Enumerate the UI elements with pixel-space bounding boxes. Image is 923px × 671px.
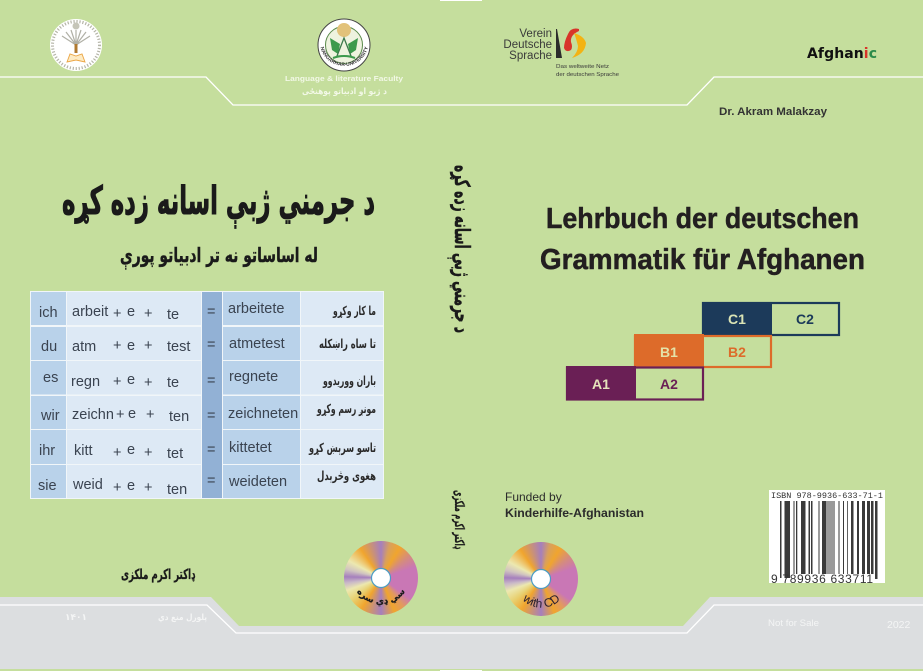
table row: sie: + xyxy=(113,480,121,496)
table row: ihr: tet xyxy=(167,446,183,462)
logo: Verein Deutsche Sprache: Verein xyxy=(519,28,552,40)
footer text: back: ۱۴۰۱ xyxy=(65,613,87,623)
footer text: back xyxy=(65,613,207,623)
faculty name xyxy=(285,74,404,97)
spine title: د جرمني ژبې اسانه زده کړه xyxy=(447,165,474,333)
table row: du: e xyxy=(127,338,135,354)
table row: ihr xyxy=(39,440,376,462)
CD label: Pashto: سي ډي سره xyxy=(357,590,404,606)
front title xyxy=(540,203,865,276)
table row: du: du xyxy=(41,339,57,355)
barcode: 9 789936 633711 xyxy=(771,572,873,586)
logo: Verein Deutsche Sprache: Sprache xyxy=(509,50,552,62)
table row: du: = xyxy=(207,337,215,353)
logo: left seal xyxy=(50,19,102,71)
CEFR level steps: A1 xyxy=(592,376,610,392)
table row: ihr: = xyxy=(207,442,215,458)
table row: du: تا ساه راښکله xyxy=(319,336,376,351)
back author name: ډاکتر اکرم ملکزی xyxy=(121,567,195,583)
CD: back cover xyxy=(344,541,418,615)
logo: Afghanic: Afghanic xyxy=(807,46,877,62)
table row: sie: + xyxy=(144,480,152,496)
logo: Verein Deutsche Sprache xyxy=(503,28,619,78)
logo: Nangarhar University: NANGARHAR-UNIVERSITY xyxy=(320,46,368,66)
CEFR level steps: C2 xyxy=(796,311,814,327)
table row: es: es xyxy=(43,370,58,386)
table row: sie: ten xyxy=(167,482,187,498)
barcode: ISBN 978-9936-633-71-1 xyxy=(771,491,883,501)
table row: ihr: + xyxy=(144,445,152,461)
back subtitle: له اساساتو نه تر ادبیاتو پورې xyxy=(120,243,318,270)
table row: wir: wir xyxy=(40,408,60,424)
back title: د جرمني ژبې اسانه زده کړه xyxy=(62,179,375,228)
table row: ich: arbeit xyxy=(72,304,108,320)
logo: Nangarhar University xyxy=(318,18,370,72)
table row: du: atmetest xyxy=(229,336,285,352)
CEFR level steps: A2 xyxy=(660,376,678,392)
table row: du: + xyxy=(144,338,152,354)
table row: es: باران ووریدوو xyxy=(322,373,376,388)
table row: wir: e xyxy=(128,406,136,422)
table row: ich: te xyxy=(167,307,179,323)
table row: du: + xyxy=(113,338,121,354)
footer text: front: 2022 xyxy=(887,619,911,631)
logo: Verein Deutsche Sprache: der deutschen Sprache xyxy=(556,72,619,78)
CEFR level steps: C1 xyxy=(728,311,746,327)
logo: Verein Deutsche Sprache: Deutsche xyxy=(503,39,552,51)
table row: sie xyxy=(38,468,376,498)
table row: wir: مونږ رسم وکړو xyxy=(316,401,376,416)
CD: front cover xyxy=(504,542,578,616)
table row: wir xyxy=(40,401,376,425)
table row: es: + xyxy=(144,375,152,391)
author name: front: Dr. Akram Malakzay xyxy=(719,106,828,118)
funded by xyxy=(505,490,644,520)
table row: es: te xyxy=(167,375,179,391)
table row: wir: zeichneten xyxy=(228,406,298,422)
table row: ihr: kittetet xyxy=(229,440,272,456)
table row: ihr: kitt xyxy=(74,443,93,459)
faculty name: د ژبو او ادبیاتو پوهنځی xyxy=(302,87,388,97)
table row: du: test xyxy=(167,339,190,355)
CEFR level steps: B2 xyxy=(728,344,746,360)
spine author: ډاکتر اکرم ملکزی xyxy=(451,490,466,550)
table row: ihr: e xyxy=(127,442,135,458)
table row: ihr: + xyxy=(113,445,121,461)
table row: es xyxy=(43,369,376,391)
table row: wir: + xyxy=(116,407,124,423)
CD holes xyxy=(372,568,550,588)
table row: ich: + xyxy=(113,306,121,322)
table row: ich: = xyxy=(207,304,215,320)
table row: wir: ten xyxy=(169,409,189,425)
table row: ich: e xyxy=(127,304,135,320)
table row: ich: ich xyxy=(39,305,58,321)
faculty name: Language & literature Faculty xyxy=(285,74,404,83)
table row: ich: + xyxy=(144,306,152,322)
table row: sie: weid xyxy=(72,477,103,493)
logo: Verein Deutsche Sprache: Das weltweite Netz xyxy=(556,64,609,70)
barcode xyxy=(769,490,885,586)
table row: wir: + xyxy=(146,407,154,423)
front title: Grammatik für Afghanen xyxy=(540,244,865,276)
table row: ich xyxy=(39,301,376,323)
table row: sie: weideten xyxy=(228,474,287,490)
front title: Lehrbuch der deutschen xyxy=(546,203,859,235)
grammar table xyxy=(30,291,384,499)
CD label: with CD: with CD xyxy=(524,595,559,608)
table row: du xyxy=(41,336,376,355)
table row: ihr: تاسو سرېښ کړو xyxy=(308,440,376,455)
table row: ich: arbeitete xyxy=(228,301,284,317)
CEFR level steps: B1 xyxy=(660,344,678,360)
table row: sie: sie xyxy=(38,478,57,494)
table row: sie: = xyxy=(207,473,215,489)
table row: sie: e xyxy=(127,478,135,494)
CEFR level steps xyxy=(566,302,839,400)
table row: sie: هغوی وڅرېدل xyxy=(317,468,376,483)
funded by: Funded by xyxy=(505,490,562,504)
table row: du: atm xyxy=(72,339,96,355)
table row: es: regnete xyxy=(229,369,278,385)
table row: ihr: ihr xyxy=(39,443,55,459)
table row: es: + xyxy=(113,374,121,390)
table row: wir: = xyxy=(207,408,215,424)
footer text: front: Not for Sale xyxy=(768,618,819,629)
funded by: Kinderhilfe-Afghanistan xyxy=(505,506,644,520)
footer text: back: پلورل منع دي xyxy=(158,613,207,623)
table row: es: = xyxy=(207,373,215,389)
table row: es: e xyxy=(127,372,135,388)
table row: ich: ما کار وکړو xyxy=(332,303,376,318)
table row: wir: zeichn xyxy=(72,407,114,423)
table row: es: regn xyxy=(71,374,100,390)
footer text: front xyxy=(768,618,911,631)
